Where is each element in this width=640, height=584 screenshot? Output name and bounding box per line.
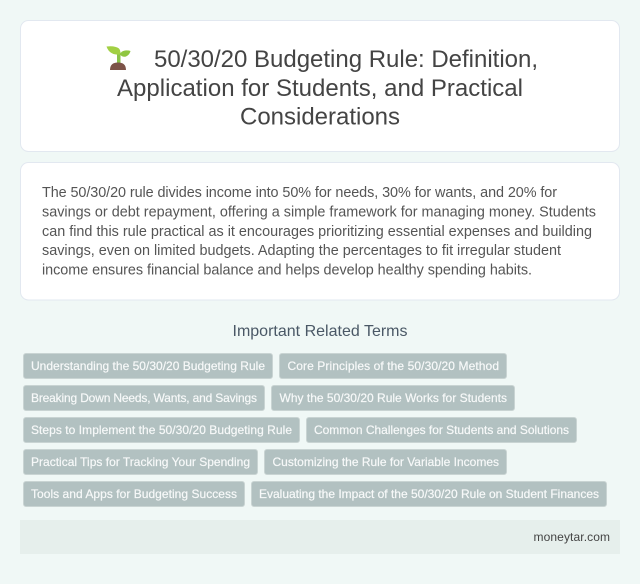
summary text: savings, even on limited budgets. Adapting the percentages to fit irregular student: [42, 243, 561, 259]
panel: summary card: [20, 162, 620, 300]
tag: [24, 354, 272, 378]
footer source text: moneytar.com: [534, 530, 610, 544]
title text: [117, 46, 538, 130]
tag: Breaking Down Needs, Wants, and Savings: [31, 391, 257, 405]
tag: [306, 418, 576, 442]
icon: sprout: [106, 46, 130, 70]
tag: Core Principles of the 50/30/20 Method: [288, 359, 499, 373]
title text: Considerations: [240, 104, 400, 130]
footer bar: [20, 520, 620, 554]
heading: related terms: Important Related Terms: [232, 323, 408, 340]
tag: Understanding the 50/30/20 Budgeting Rule: [31, 359, 265, 373]
tag: Evaluating the Impact of the 50/30/20 Rule on Student Finances: [259, 487, 599, 501]
tag list: [24, 354, 606, 506]
panel: title card: [20, 20, 620, 152]
summary text: savings or debt repayment, offering a simple framework for managing money. Students: [42, 204, 596, 220]
tag: [272, 386, 514, 410]
tag: Customizing the Rule for Variable Incomes: [272, 455, 499, 469]
tag: [24, 386, 264, 410]
tag: Tools and Apps for Budgeting Success: [31, 487, 237, 501]
tag: Practical Tips for Tracking Your Spending: [31, 455, 250, 469]
tag: Common Challenges for Students and Solutions: [314, 423, 569, 437]
summary text: The 50/30/20 rule divides income into 50% for needs, 30% for wants, and 20% for: [42, 185, 557, 201]
tag: Steps to Implement the 50/30/20 Budgeting Rule: [31, 423, 292, 437]
tag: [280, 354, 506, 378]
tag: Why the 50/30/20 Rule Works for Students: [280, 391, 507, 405]
tag: [24, 450, 258, 474]
summary text: income ensures financial balance and helps develop healthy spending habits.: [42, 263, 532, 279]
tag: [252, 482, 606, 506]
tag: [264, 450, 506, 474]
tag: [24, 482, 244, 506]
summary text: can find this rule practical as it encourages prioritizing essential expenses and building: [42, 224, 592, 240]
tag: [24, 418, 300, 442]
title text: 50/30/20 Budgeting Rule: Definition,: [154, 46, 538, 73]
title text: Application for Students, and Practical: [117, 75, 523, 102]
summary text: [42, 185, 596, 279]
